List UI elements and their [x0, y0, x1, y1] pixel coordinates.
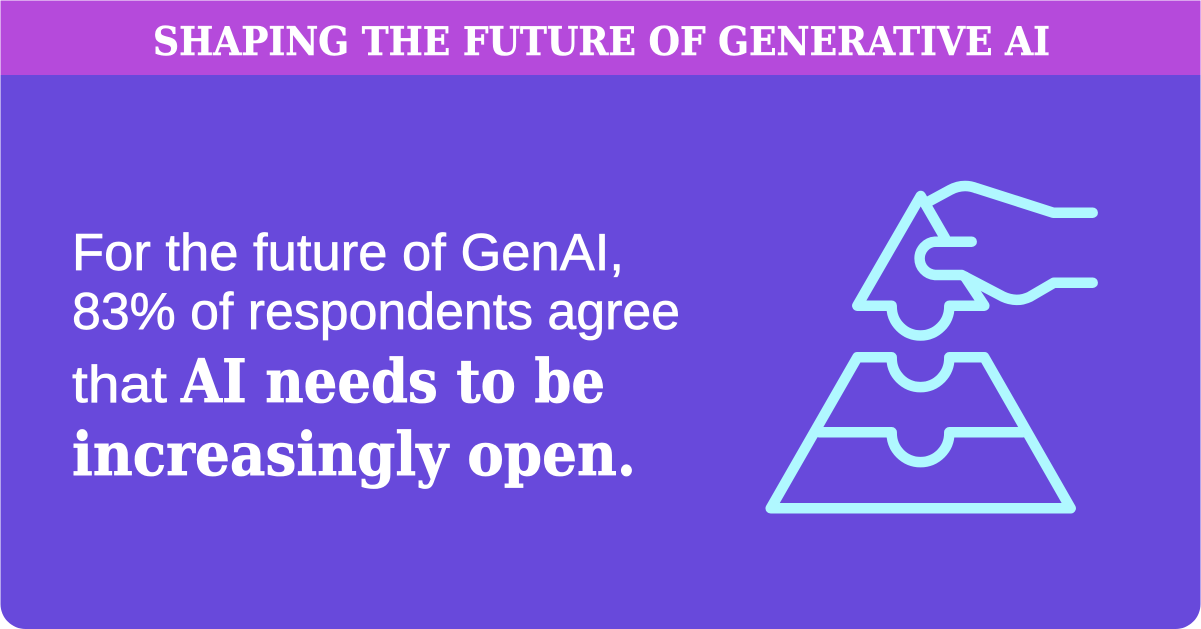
text block: main statement: For the future of GenAI,: [72, 224, 624, 282]
text block: main statement: increasingly open.: [72, 420, 636, 490]
text block: main statement: AI needs to be: [180, 347, 605, 417]
icon: top puzzle piece: [857, 196, 984, 336]
text block: main statement: [72, 224, 680, 490]
icon: lower pyramid pieces: [771, 357, 1071, 508]
text block: main statement: 83% of respondents agree: [72, 283, 680, 341]
heading: SHAPING THE FUTURE OF GENERATIVE AI: [153, 19, 1050, 65]
icon: pyramid middle seam: [819, 432, 1023, 462]
panel: magenta header band: [0, 0, 1200, 75]
icon: hand: [920, 186, 1093, 300]
text block: main statement: that: [72, 356, 168, 414]
icon: hand placing puzzle piece on pyramid: [771, 186, 1093, 508]
